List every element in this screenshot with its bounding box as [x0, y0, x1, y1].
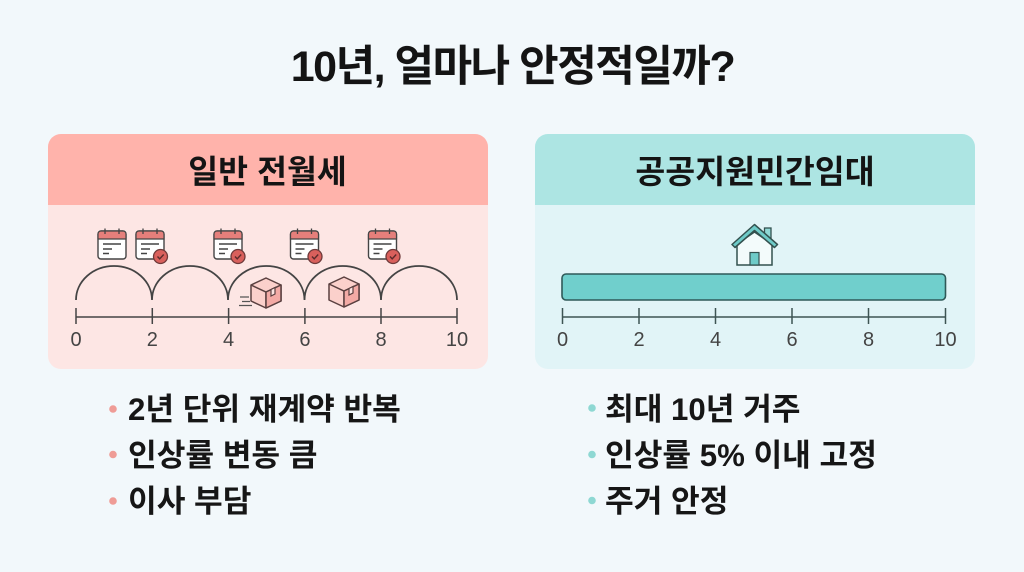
icon: house [732, 224, 778, 265]
timeline axis: 0 [70, 329, 82, 351]
icon: calendar with check 2 [136, 228, 168, 264]
icon: moving box [329, 277, 359, 307]
panel header: 일반 전월세 [48, 134, 488, 205]
icon: calendar with check 6 [290, 228, 322, 264]
list: 일반 전월세 points: 이사 부담 [128, 484, 251, 519]
icon: calendar with check 4 [214, 228, 245, 264]
panel header: 공공지원민간임대 [535, 134, 975, 205]
icon: calendar with check 8 [368, 228, 400, 264]
timeline axis: 2 [633, 329, 645, 351]
panel header: 공공지원민간임대: 공공지원민간임대 [635, 154, 875, 190]
list: 공공지원민간임대 points: 최대 10년 거주 [605, 392, 800, 427]
timeline axis: 6 [786, 329, 798, 351]
timeline axis: 4 [223, 329, 234, 351]
contract arcs [76, 266, 457, 300]
timeline axis: 8 [863, 329, 874, 351]
timeline axis [70, 308, 468, 351]
timeline axis: 8 [375, 329, 387, 351]
icon: calendar [98, 228, 126, 259]
title: 10년, 얼마나 안정적일까? [291, 43, 734, 91]
timeline axis: 4 [710, 329, 721, 351]
list: 일반 전월세 points: 인상률 변동 큼 [128, 438, 318, 473]
timeline axis: 6 [299, 329, 310, 351]
timeline axis: 10 [934, 329, 957, 351]
list: 공공지원민간임대 points [588, 392, 877, 519]
list: 일반 전월세 points [109, 392, 401, 519]
timeline axis: 2 [147, 329, 158, 351]
panel: 일반 전월세 [48, 134, 488, 369]
timeline axis: 10 [446, 329, 468, 351]
10-year bar [562, 274, 946, 300]
icon: moving box with speed lines [239, 278, 281, 308]
timeline axis: 0 [557, 329, 568, 351]
timeline axis [557, 308, 957, 351]
list: 일반 전월세 points: 2년 단위 재계약 반복 [128, 392, 401, 427]
panel: 공공지원민간임대 [535, 134, 975, 369]
list: 공공지원민간임대 points: 인상률 5% 이내 고정 [605, 438, 877, 473]
list: 공공지원민간임대 points: 주거 안정 [605, 484, 728, 519]
panel header: 일반 전월세: 일반 전월세 [188, 154, 347, 190]
